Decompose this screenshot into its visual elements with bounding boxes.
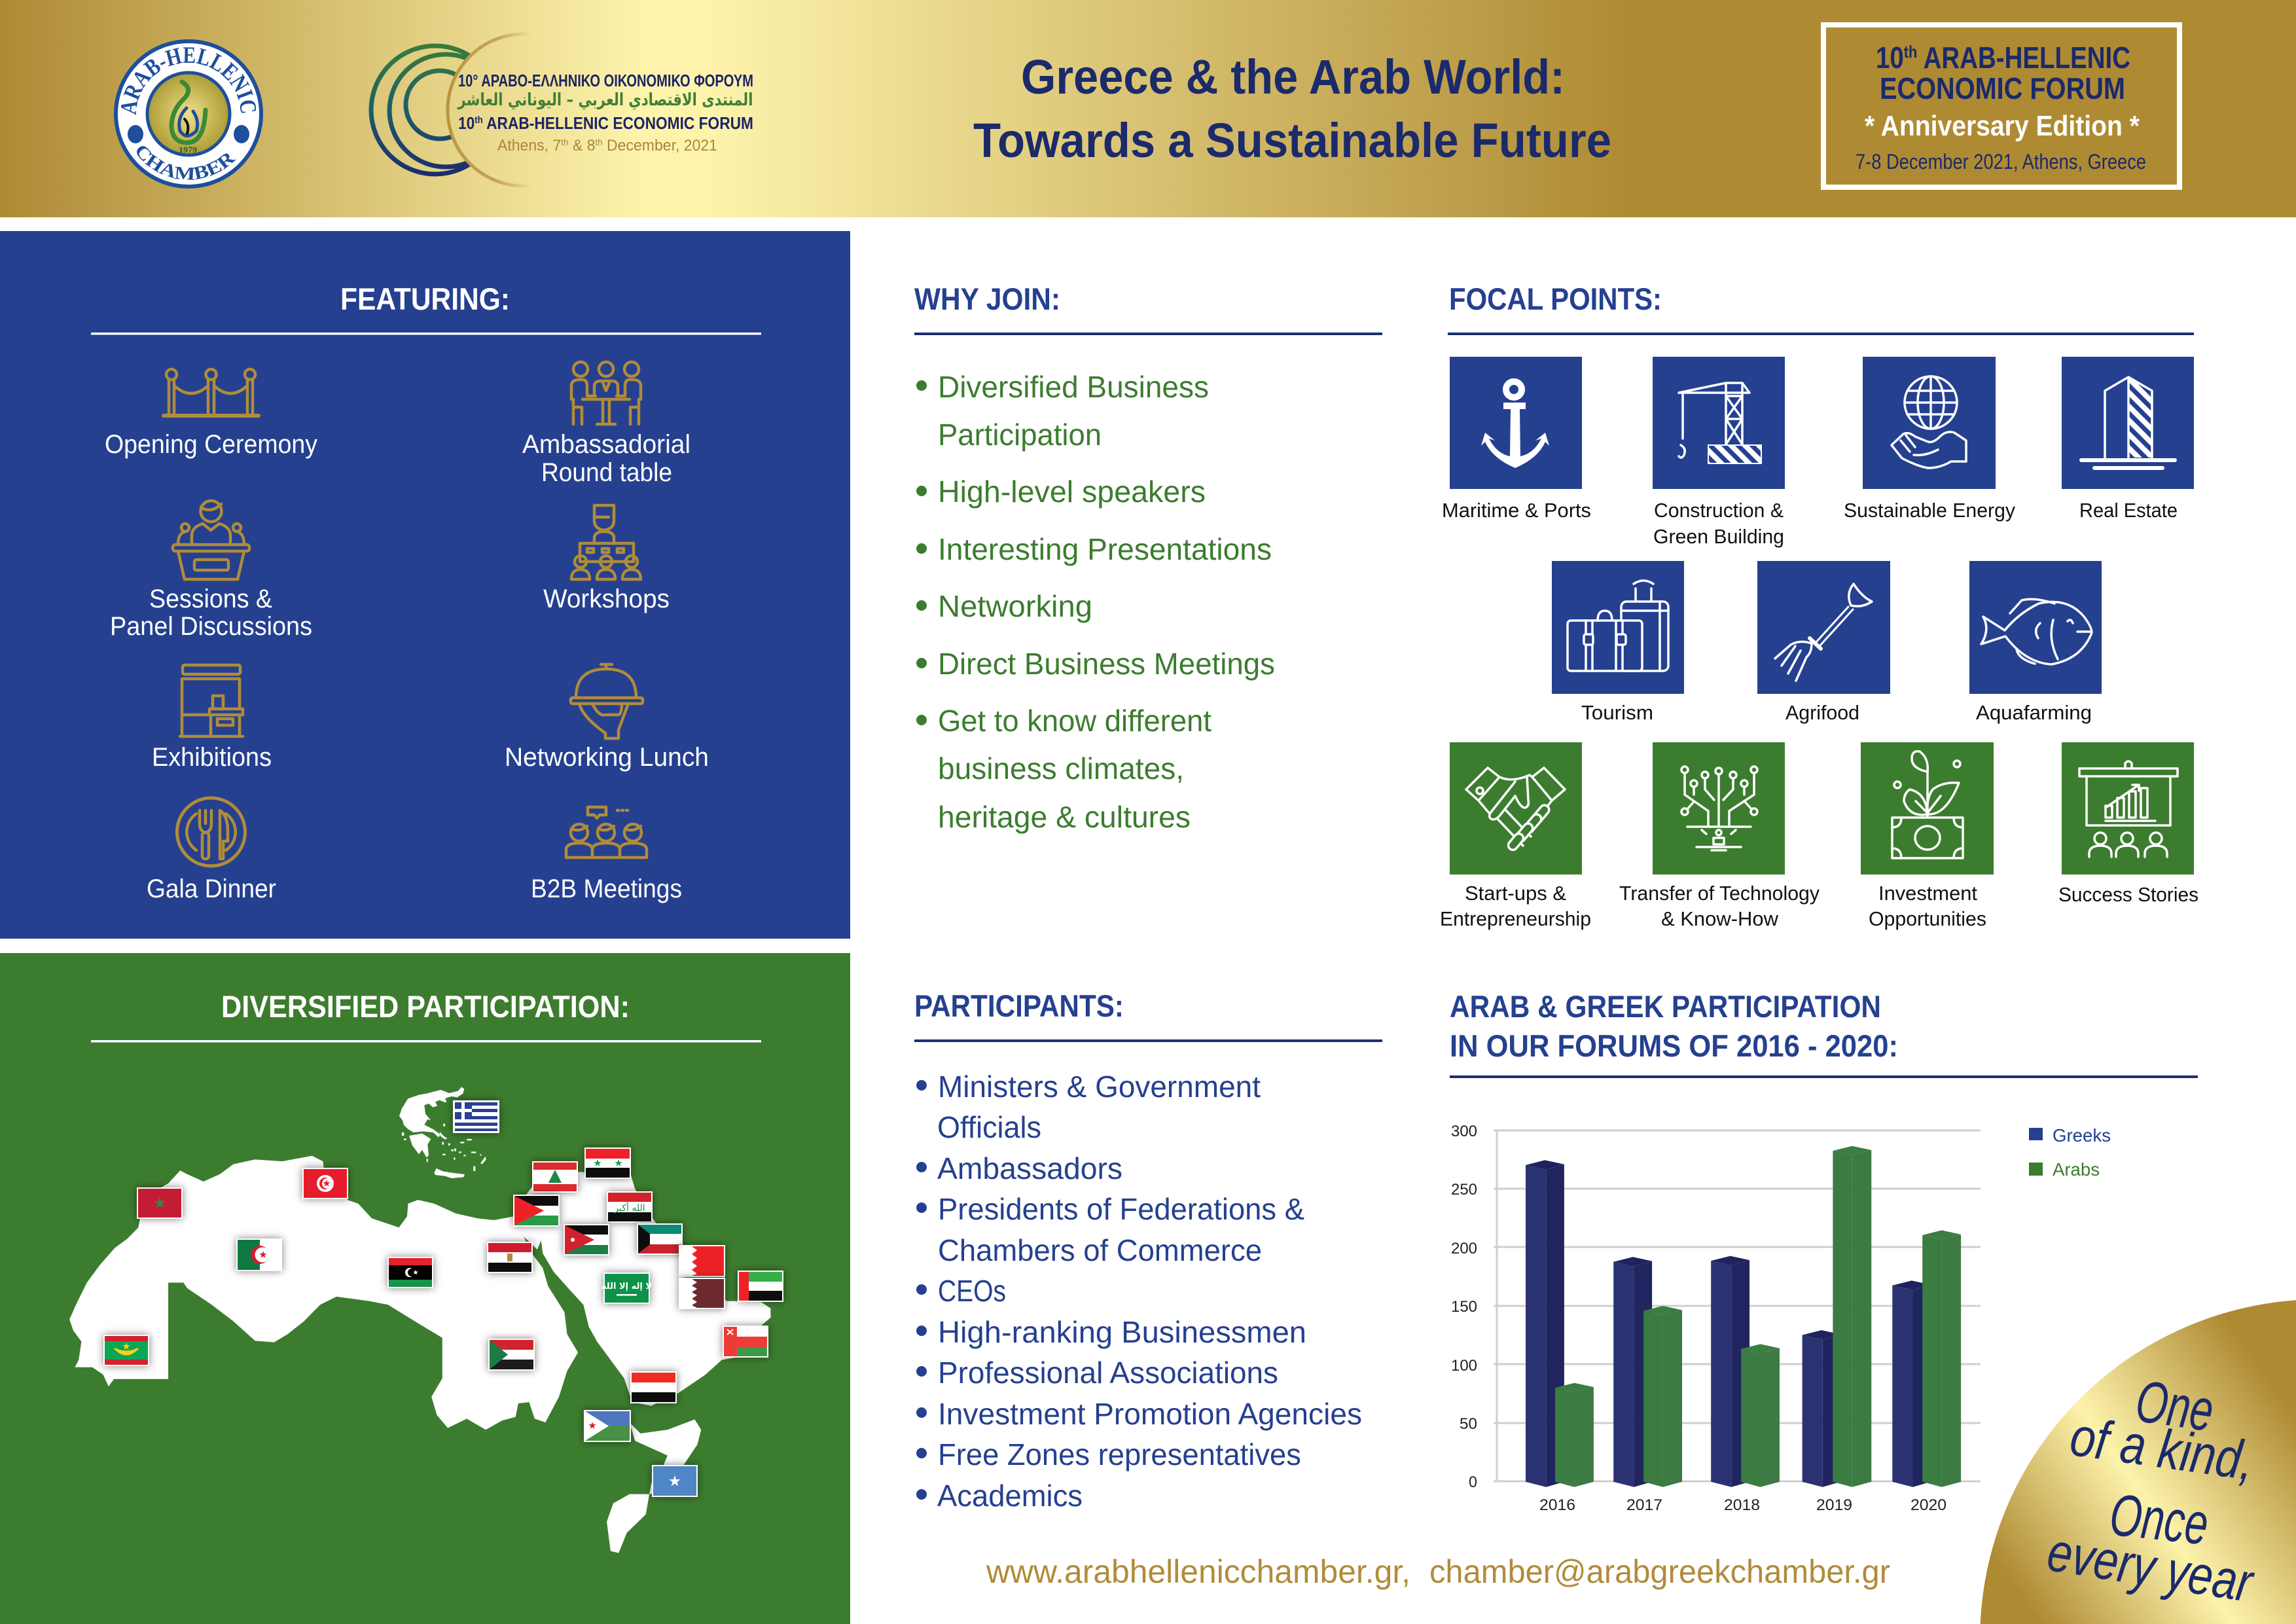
label: start-ups and entrepreneurship <box>1440 882 1591 930</box>
flag: Bahrain <box>679 1245 725 1277</box>
icon: exhibitions <box>180 665 243 736</box>
list: why join items: Get to know different <box>938 704 1211 738</box>
y axis labels <box>1451 1123 1477 1491</box>
heading: focal points: FOCAL POINTS: <box>1449 281 1662 316</box>
label: ambassadorial round table: Ambassadorial <box>522 430 691 459</box>
list: why join items: Interesting Presentations <box>938 532 1272 566</box>
flag: Tunisia <box>302 1168 348 1199</box>
label: investment opportunities: Investment <box>1878 882 1977 905</box>
logo: Arab-Hellenic Chamber <box>114 39 263 189</box>
y axis labels: 0 <box>1469 1473 1477 1491</box>
slogan: one of a kind: One <box>2132 1369 2217 1444</box>
map: Arab world <box>69 1156 770 1553</box>
panel: diversified participation map <box>0 953 850 1624</box>
label: investment opportunities: Opportunities <box>1869 907 1986 930</box>
edition box: 10 <box>1876 41 1909 75</box>
gold corner slogan <box>1981 1300 2296 1624</box>
tile: aquafarming <box>1969 561 2102 694</box>
list: participants items: CEOs <box>938 1274 1006 1308</box>
y axis labels: 150 <box>1451 1298 1477 1316</box>
icon: networking lunch <box>571 664 643 738</box>
tile: maritime and ports <box>1450 357 1582 489</box>
list: why join items <box>916 370 1275 834</box>
slogan: one of a kind <box>2066 1369 2258 1492</box>
flag: Syria <box>584 1147 631 1179</box>
main title <box>973 50 1611 168</box>
y axis labels: 200 <box>1451 1240 1477 1257</box>
flag: Kuwait <box>637 1223 683 1255</box>
legend <box>2029 1125 2111 1180</box>
x axis labels <box>1539 1496 1946 1514</box>
contact line: chamber@arabgreekchamber.gr <box>1429 1553 1890 1590</box>
list: participants items: Presidents of Federations & <box>938 1192 1304 1226</box>
forum name: English: 10 <box>458 113 477 133</box>
label: start-ups and entrepreneurship: Entrepreneurship <box>1440 907 1591 930</box>
label: B2B meetings: B2B Meetings <box>531 875 682 903</box>
heading: featuring: FEATURING: <box>340 281 510 316</box>
list: participants items: Investment Promotion Agencies <box>938 1397 1362 1431</box>
slogan: once every year: Once <box>2107 1482 2212 1558</box>
icon: sessions podium <box>173 501 249 579</box>
flag: Sudan <box>488 1339 535 1371</box>
tile: agrifood <box>1757 561 1890 694</box>
heading: arab and greek participation: ARAB & GREEK PARTICIPATION <box>1450 989 1881 1024</box>
list: why join items: Diversified Business <box>938 370 1209 404</box>
edition box: ARAB-HELLENIC <box>1917 41 2130 75</box>
label: aquafarming: Aquafarming <box>1976 701 2092 724</box>
panel: featuring <box>0 231 850 939</box>
label: sessions and panel discussions: Sessions & <box>149 585 272 613</box>
logo: Arab-Hellenic Chamber: ARAB-HELLENIC <box>120 47 257 115</box>
panel: participation chart <box>1450 989 2198 1514</box>
edition box: * Anniversary Edition * <box>1865 110 2140 142</box>
contact line: www.arabhellenicchamber.gr, <box>986 1553 1410 1590</box>
label: sessions and panel discussions: Panel Discussions <box>110 612 312 641</box>
heading: participants: PARTICIPANTS: <box>914 988 1124 1023</box>
contact line <box>986 1553 1890 1590</box>
label: transfer of technology and know-how: & Know-How <box>1661 907 1779 930</box>
flag: Mauritania <box>103 1335 149 1366</box>
flag: Palestine <box>513 1195 560 1227</box>
label: investment opportunities <box>1869 882 1986 930</box>
icon: opening ceremony <box>164 369 259 416</box>
label: real estate: Real Estate <box>2079 499 2178 522</box>
label: ambassadorial round table <box>522 430 691 487</box>
logo: Arab-Hellenic Chamber: CHAMBER <box>137 146 236 180</box>
forum name: Arabic: المنتدى الاقتصادي العربي – اليوناني العاشر <box>457 90 753 110</box>
label: maritime and ports: Maritime & Ports <box>1442 499 1591 522</box>
forum dates: th <box>595 137 603 147</box>
label: construction and green building: Green Building <box>1653 525 1784 548</box>
flag: Algeria <box>236 1238 282 1271</box>
label: workshops: Workshops <box>543 585 670 613</box>
list: participants items: Ambassadors <box>937 1151 1122 1185</box>
heading: diversified participation: DIVERSIFIED PARTICIPATION: <box>221 989 630 1024</box>
forum dates: th <box>561 137 568 147</box>
tile: success stories <box>2062 742 2194 875</box>
edition box: 7-8 December 2021, Athens, Greece <box>1856 150 2146 173</box>
flag: Somalia <box>652 1465 698 1497</box>
x axis labels: 2020 <box>1910 1496 1946 1514</box>
icon: gala dinner <box>177 798 245 866</box>
list: participants items: Officials <box>937 1110 1041 1144</box>
tile: start-ups <box>1450 742 1582 875</box>
label: construction and green building <box>1653 499 1784 548</box>
y axis labels: 100 <box>1451 1357 1477 1375</box>
flag: Greece <box>453 1100 499 1133</box>
tile: investment opportunities <box>1861 742 1994 875</box>
label: networking lunch: Networking Lunch <box>505 743 709 772</box>
heading: arab and greek participation: IN OUR FORUMS OF 2016 - 2020: <box>1450 1028 1898 1063</box>
list: why join items: High-level speakers <box>938 475 1206 509</box>
icon: workshops <box>571 505 641 579</box>
list: why join items: Networking <box>938 589 1092 623</box>
flag: Morocco <box>137 1187 183 1219</box>
label: ambassadorial round table: Round table <box>541 458 672 487</box>
main title: Greece & the Arab World: <box>1021 50 1565 104</box>
bars: Arabs <box>1555 1146 1961 1487</box>
forum name: English: th <box>475 115 483 126</box>
header band <box>0 0 2296 217</box>
list: participants items: High-ranking Businessmen <box>938 1315 1306 1349</box>
flag: UAE <box>738 1271 783 1302</box>
label: sustainable energy: Sustainable Energy <box>1844 499 2015 522</box>
tile: transfer of technology <box>1653 742 1785 875</box>
slogan: one of a kind: of a kind, <box>2066 1405 2258 1492</box>
edition box <box>1823 25 2179 187</box>
label: transfer of technology and know-how: Transfer of Technology <box>1619 882 1820 905</box>
flag: Oman <box>723 1326 768 1358</box>
list: why join items: heritage & cultures <box>938 800 1191 834</box>
list: why join items: Participation <box>938 418 1102 452</box>
list: why join items: business climates, <box>938 751 1184 785</box>
label: success stories: Success Stories <box>2058 883 2198 906</box>
label: transfer of technology and know-how <box>1619 882 1820 930</box>
label: exhibitions: Exhibitions <box>152 743 272 772</box>
heading: why join: WHY JOIN: <box>914 281 1060 316</box>
list: participants items <box>916 1070 1362 1513</box>
heading: arab and greek participation <box>1450 989 1898 1063</box>
label: sessions and panel discussions <box>110 585 312 641</box>
x axis labels: 2016 <box>1539 1496 1575 1514</box>
icon: B2B meetings <box>566 807 647 857</box>
list: participants items: Free Zones representatives <box>938 1437 1301 1471</box>
tile: real estate <box>2062 357 2194 489</box>
logo: Arab-Hellenic Chamber: 1979 <box>179 145 198 154</box>
label: opening ceremony: Opening Ceremony <box>105 430 317 459</box>
label: gala dinner: Gala Dinner <box>147 875 276 903</box>
label: start-ups and entrepreneurship: Start-ups & <box>1465 882 1566 905</box>
flag: Libya <box>387 1257 433 1288</box>
flag: Qatar <box>679 1278 725 1309</box>
panel: participants <box>914 988 1382 1513</box>
flag: Iraq: الله أكبر <box>613 1202 645 1214</box>
panel: why join <box>914 281 1382 834</box>
legend: Greeks <box>2053 1125 2111 1146</box>
flag: Saudi Arabia <box>601 1272 652 1304</box>
slogan: once every year <box>2043 1482 2258 1614</box>
panel: focal points <box>1440 281 2198 930</box>
forum name: Greek: 10° ΑΡΑΒΟ-ΕΛΛΗΝΙΚΟ ΟΙΚΟΝΟΜΙΚΟ ΦΟΡΟΥΜ <box>458 71 753 90</box>
list: why join items: Direct Business Meetings <box>938 647 1275 681</box>
tile: sustainable energy <box>1863 357 1996 489</box>
bar chart <box>1451 1123 2111 1514</box>
flag: Iraq <box>607 1191 653 1223</box>
tile: tourism <box>1552 561 1684 694</box>
forum dates: & 8 <box>568 137 595 154</box>
list: participants items: Professional Associations <box>938 1356 1278 1390</box>
y axis labels: 50 <box>1460 1415 1477 1433</box>
x axis labels: 2019 <box>1816 1496 1852 1514</box>
label: tourism: Tourism <box>1581 701 1653 724</box>
list: participants items: Ministers & Government <box>938 1070 1261 1104</box>
flag: Yemen <box>630 1371 677 1403</box>
bars: Greeks <box>1526 1160 1931 1487</box>
map: Greece <box>399 1087 486 1178</box>
edition box: ECONOMIC FORUM <box>1880 71 2125 105</box>
tile: construction <box>1653 357 1785 489</box>
x axis labels: 2018 <box>1724 1496 1760 1514</box>
forum dates: Athens, 7 <box>497 137 564 154</box>
y axis labels: 250 <box>1451 1181 1477 1199</box>
x axis labels: 2017 <box>1626 1496 1662 1514</box>
flag: Djibouti <box>584 1410 631 1442</box>
y axis labels: 300 <box>1451 1123 1477 1140</box>
main title: Towards a Sustainable Future <box>973 113 1611 168</box>
label: construction and green building: Construction & <box>1654 499 1784 522</box>
icon: ambassadorial round table <box>571 362 641 424</box>
flag: Lebanon <box>532 1161 578 1193</box>
list: participants items: Academics <box>937 1479 1083 1513</box>
list: participants items: Chambers of Commerce <box>938 1233 1262 1267</box>
logo: forum rings <box>371 34 600 186</box>
label: agrifood: Agrifood <box>1785 701 1859 724</box>
flag: Jordan <box>564 1224 609 1255</box>
forum name: English: ARAB-HELLENIC ECONOMIC FORUM <box>483 113 753 133</box>
flag: Egypt <box>487 1242 533 1273</box>
edition box: th <box>1904 42 1917 62</box>
forum dates: December, 2021 <box>603 137 717 154</box>
flag: Saudi Arabia: لا إله إلا الله <box>601 1282 652 1291</box>
legend: Arabs <box>2053 1159 2100 1180</box>
